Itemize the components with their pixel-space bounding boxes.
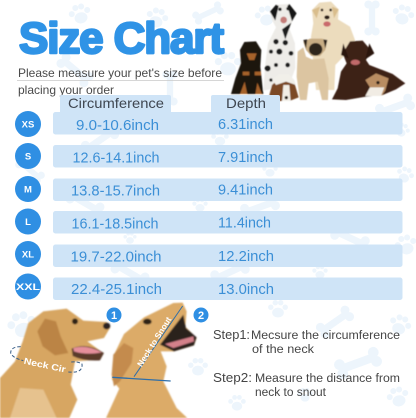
step 1 text: Step1: bbox=[213, 327, 250, 342]
photo: dog with neck circumference bbox=[0, 309, 110, 418]
row: XXL: 13.0inch bbox=[218, 282, 274, 298]
step 1 text bbox=[213, 327, 400, 356]
table column headers bbox=[60, 95, 280, 112]
marker 1 bbox=[106, 308, 122, 322]
row: L: 11.4inch bbox=[218, 216, 271, 232]
row: XS bbox=[15, 111, 402, 137]
row: XXL: XXL bbox=[16, 282, 40, 293]
step 1 text: of the neck bbox=[252, 344, 314, 356]
dog: beagle bbox=[269, 74, 299, 101]
header: depth bbox=[211, 95, 280, 112]
row: XS: 9.0-10.6inch bbox=[76, 118, 159, 134]
dog: small puppy bbox=[365, 73, 389, 96]
dog: black and tan spaniel bbox=[231, 41, 263, 94]
dog: dalmatian bbox=[263, 4, 297, 91]
step 2 text bbox=[213, 370, 400, 399]
marker 2 bbox=[194, 308, 208, 322]
row: XXL bbox=[15, 274, 402, 300]
dog: chocolate labrador bbox=[332, 41, 405, 100]
row: XXL: 22.4-25.1inch bbox=[71, 282, 162, 298]
dog: pug bbox=[297, 39, 329, 100]
row: M: 13.8-15.7inch bbox=[71, 184, 160, 200]
row: S: 7.91inch bbox=[218, 150, 273, 166]
row: L bbox=[15, 208, 402, 234]
marker 2: 2 bbox=[198, 310, 204, 322]
row: L: L bbox=[25, 217, 31, 228]
measuring instruction: Please measure your pet's size before bbox=[18, 66, 222, 80]
row: M: M bbox=[24, 184, 32, 196]
marker 1: 1 bbox=[111, 310, 117, 322]
row: XS: 6.31inch bbox=[218, 117, 273, 133]
row: S: S bbox=[25, 152, 31, 162]
row: XL bbox=[15, 241, 402, 267]
step 2 text: Step2: bbox=[213, 370, 252, 385]
step 1 text: Mecsure the circumference bbox=[251, 330, 400, 342]
row: S: 12.6-14.1inch bbox=[72, 150, 160, 166]
step 2 text: Measure the distance from bbox=[255, 373, 400, 385]
dog: golden retriever bbox=[311, 2, 355, 90]
row: XL: 19.7-22.0inch bbox=[70, 250, 162, 266]
photo: dog with neck to snout: Neck to Snout bbox=[135, 315, 173, 368]
row: M bbox=[15, 176, 402, 202]
row: XS: XS bbox=[22, 120, 34, 130]
row: M: 9.41inch bbox=[218, 182, 273, 198]
measuring instruction: placing your order bbox=[18, 83, 114, 97]
row: S bbox=[15, 143, 402, 169]
photo: dog with neck circumference: Neck Cir bbox=[23, 356, 67, 375]
step 2 text: neck to snout bbox=[255, 387, 327, 399]
photo: dog with neck to snout bbox=[106, 303, 197, 418]
title: Size Chart bbox=[19, 14, 224, 63]
dog group photo bbox=[231, 2, 405, 101]
header: depth: Depth bbox=[226, 95, 266, 111]
row: L: 16.1-18.5inch bbox=[72, 216, 158, 232]
measuring instruction bbox=[17, 66, 224, 97]
row: XL: 12.2inch bbox=[218, 249, 274, 265]
row: XL: XL bbox=[22, 250, 34, 260]
header: circumference: Circumference bbox=[68, 95, 164, 111]
